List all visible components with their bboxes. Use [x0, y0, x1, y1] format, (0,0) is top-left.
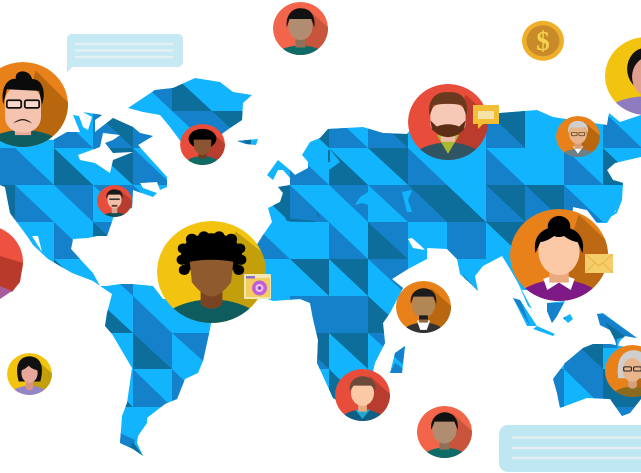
portrait: older woman, right edge	[605, 345, 641, 397]
portrait: man with brown hair	[335, 369, 390, 421]
portrait: man with dark beard	[396, 281, 451, 333]
portrait: partial red circle, left edge	[0, 225, 23, 299]
portrait: man with curly hair, Greenland	[180, 124, 225, 165]
portrait: bearded man	[408, 84, 488, 160]
speech bubble: bottom right	[499, 425, 641, 472]
icon: gold coin: $	[536, 26, 550, 56]
portrait: woman with afro, large yellow	[157, 221, 266, 323]
icon: envelope	[585, 254, 613, 273]
inland seas and bays	[32, 133, 425, 252]
icon: folder with disc	[244, 274, 271, 299]
portrait: person, bottom centre	[417, 406, 472, 458]
portrait: man with glasses, left	[0, 62, 68, 147]
icon: gold coin	[522, 21, 564, 61]
speech bubble: top left	[67, 34, 183, 73]
portrait: woman with bun	[510, 209, 608, 301]
portrait: woman in purple, top right	[605, 37, 641, 115]
world map with triangle pattern	[0, 78, 641, 456]
icon: yellow chat bubble	[473, 105, 499, 129]
portrait: person, top centre	[273, 2, 328, 55]
portrait: older man with glasses	[556, 116, 600, 157]
portrait: small man, North America	[97, 185, 132, 217]
portrait: woman with purple top, lower left	[7, 353, 52, 395]
